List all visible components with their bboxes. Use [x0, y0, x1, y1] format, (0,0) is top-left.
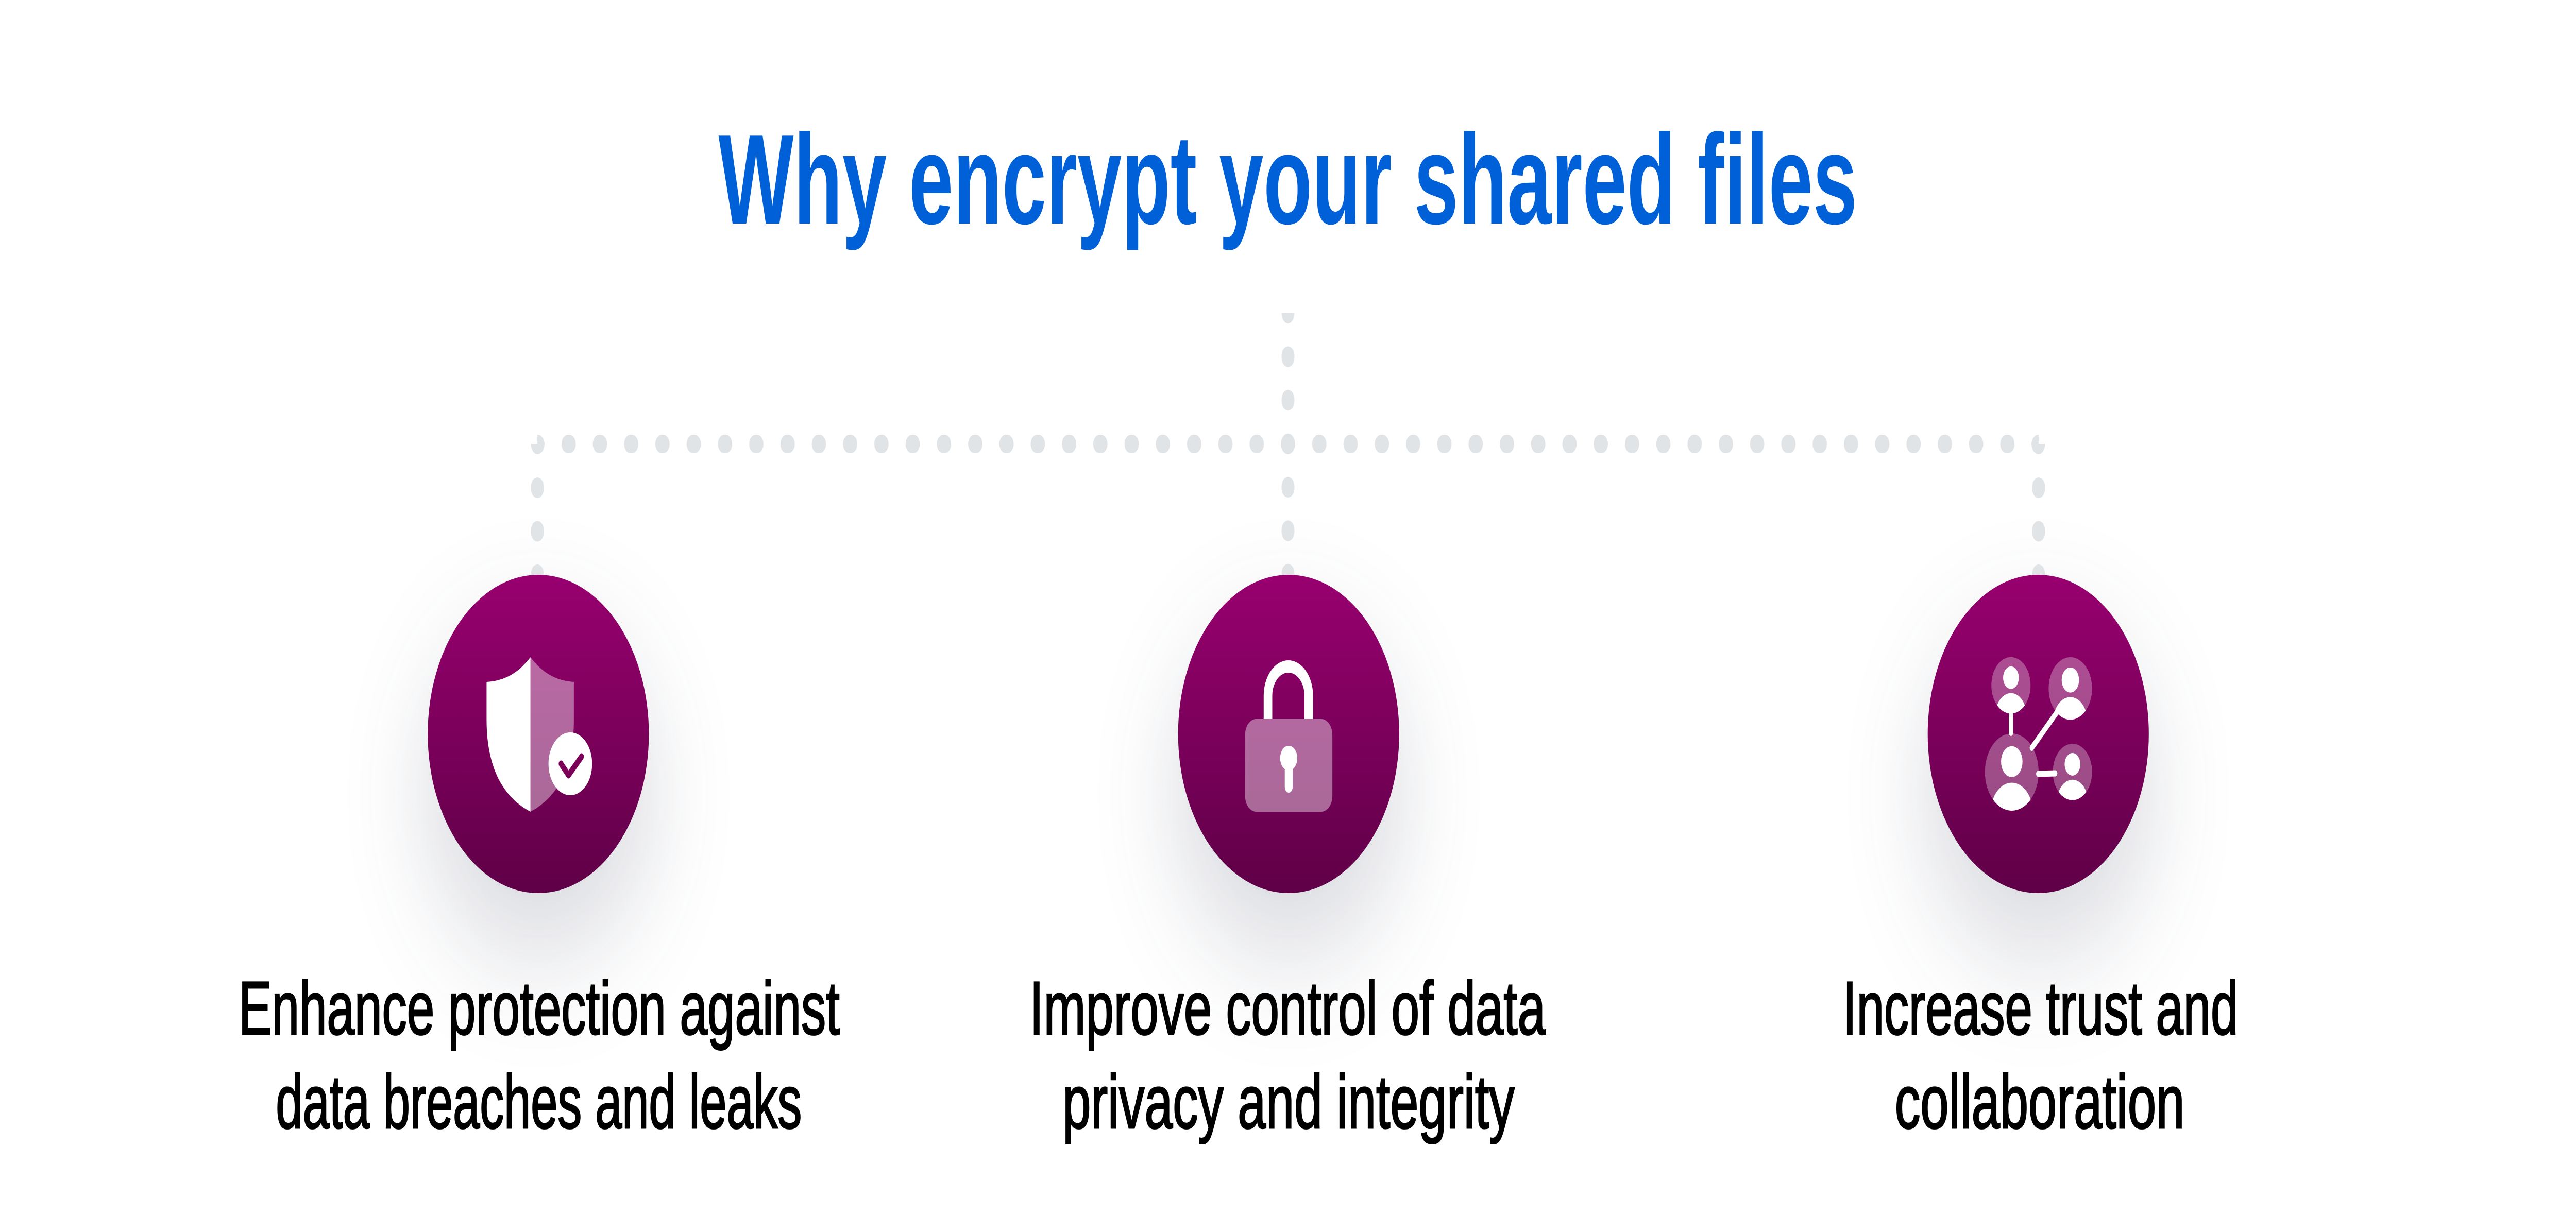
text: protection: data breaches and leaks [276, 1059, 802, 1144]
text: control [1030, 965, 1546, 1144]
panel: protection [239, 575, 840, 1144]
text: trust: Increase trust and [1843, 965, 2238, 1050]
panel: control [1030, 575, 1546, 1144]
text: protection [239, 965, 840, 1144]
dotted connector [531, 313, 2045, 577]
icon: connected people [1985, 657, 2092, 811]
text: trust: collaboration [1895, 1059, 2184, 1144]
text: trust [1843, 965, 2238, 1144]
circle badge [428, 575, 649, 893]
title: Why encrypt your shared files [718, 109, 1857, 251]
circle badge [1178, 575, 1399, 893]
icon: padlock [1245, 666, 1332, 812]
text: control: Improve control of data [1030, 965, 1546, 1050]
text: control: privacy and integrity [1062, 1059, 1515, 1144]
panel: trust [1843, 575, 2238, 1144]
icon: shield with check [486, 657, 592, 812]
text: protection: Enhance protection against [239, 965, 840, 1050]
icon shadows [431, 639, 2146, 948]
circle badge [1928, 575, 2149, 893]
